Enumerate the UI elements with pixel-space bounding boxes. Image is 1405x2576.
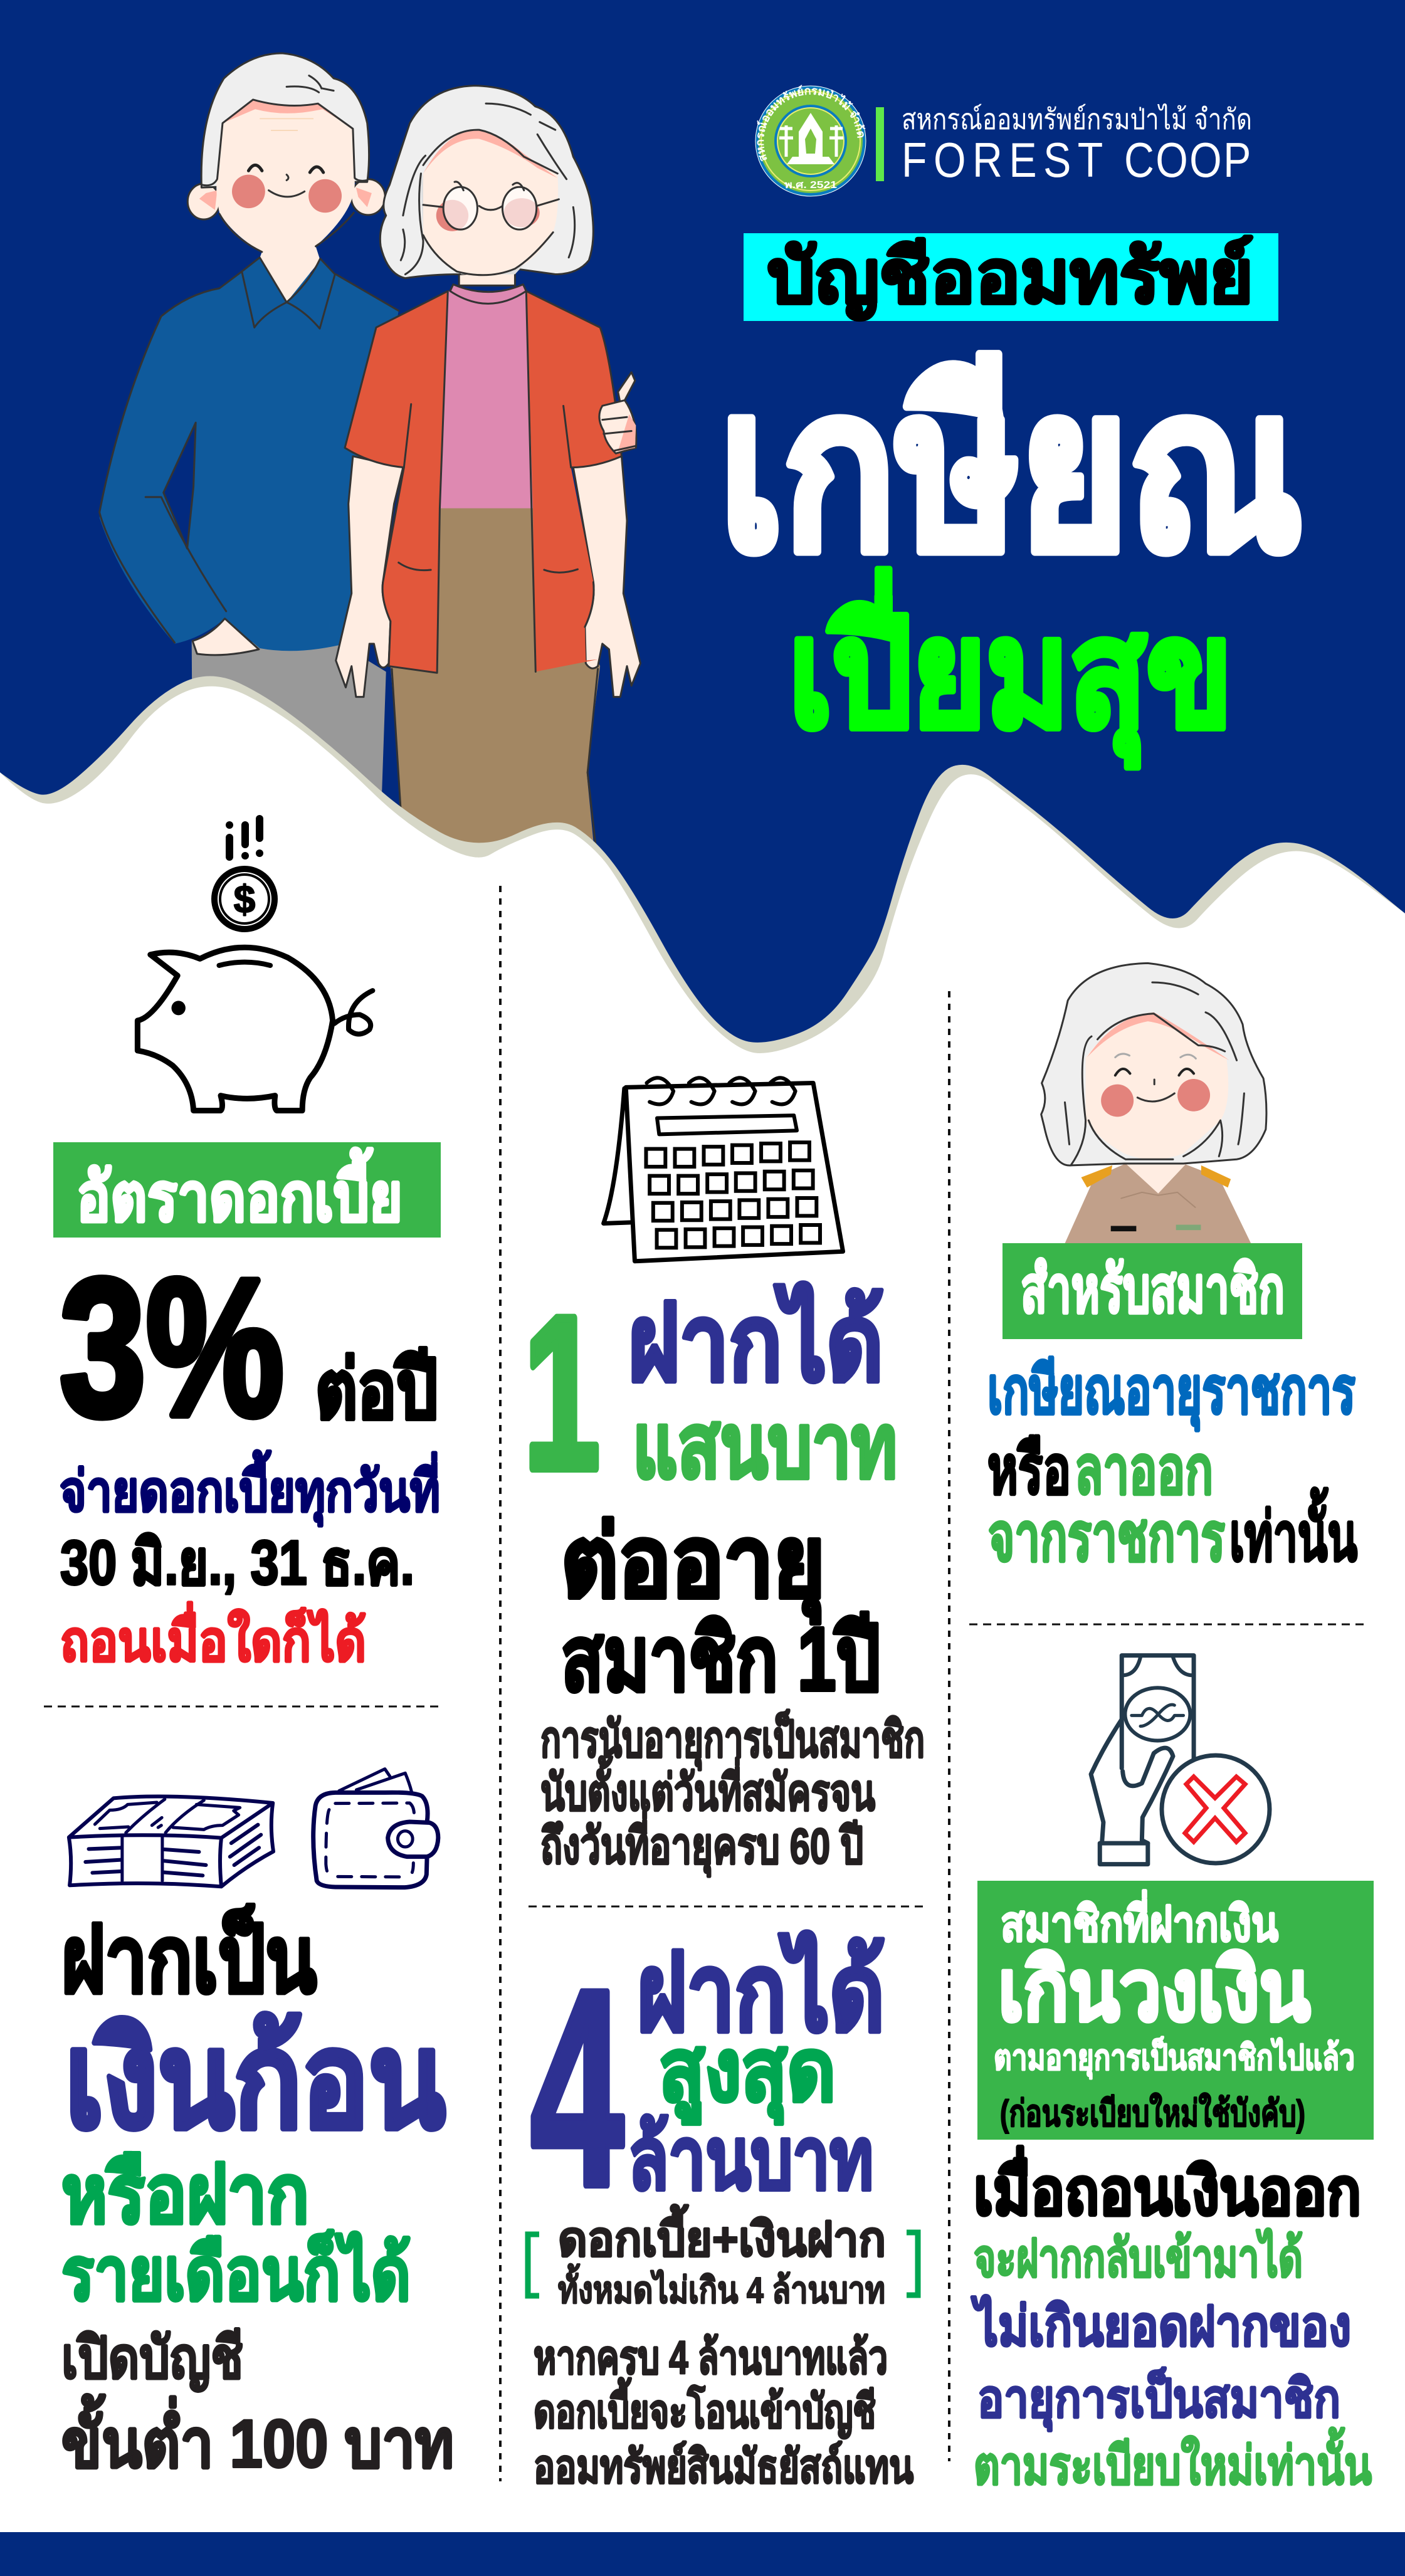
panel: over limit notice [977, 1881, 1374, 2140]
man's hand on woman's arm [599, 372, 636, 453]
woman's pink top [439, 291, 534, 508]
monthly: รายเดือนก็ได้ [61, 2229, 411, 2316]
horizontal dashed divider left [44, 1705, 440, 1708]
note: counting membership line 1: การนับอายุการเป็นสมาชิก [540, 1709, 925, 1771]
main title second line: เปี่ยมสุข [789, 569, 1233, 768]
panel: over limit notice: เกินวงเงิน [998, 1943, 1310, 2038]
horizontal dashed divider right [969, 1624, 1364, 1625]
deposit allowed max: ฝากได้ [637, 1932, 885, 2053]
logo: cooperative seal [755, 85, 866, 197]
withdraw anytime: ถอนเมื่อใดก็ได้ [60, 1602, 366, 1673]
highest: สูงสุด [659, 2022, 836, 2125]
pay dates: 30 มิ.ย., 31 ธ.ค. [60, 1528, 414, 1598]
woman's skirt [391, 507, 600, 873]
interest plus deposit: ดอกเบี้ย+เงินฝาก [558, 2204, 886, 2266]
main title: เกษียณ [719, 345, 1302, 596]
icon: calendar [604, 1078, 843, 1261]
heading: deposit as: ฝากเป็น [61, 1904, 317, 2012]
subtitle: บัญชีออมทรัพย์ [767, 236, 1253, 320]
man's head [187, 53, 385, 302]
FOREST COOP wordmark: FOREST [902, 133, 1103, 187]
or deposit: หรือฝาก [61, 2148, 309, 2240]
deposit allowed: ฝากได้ [628, 1282, 883, 1403]
logo: cooperative seal: สหกรณ์ออมทรัพย์กรมป่าไม้ จำกัด [757, 85, 865, 162]
man's sweater [100, 271, 399, 651]
note: counting membership line 2: นับตั้งแต่วันที่สมัครจน [540, 1756, 875, 1821]
horizontal dashed divider middle [529, 1906, 924, 1907]
label: interest rate: อัตราดอกเบี้ย [76, 1147, 403, 1235]
man's sweater outlines [100, 271, 399, 643]
woman's neck and sweater collar [450, 269, 526, 303]
FOREST COOP wordmark: COOP [1124, 133, 1251, 187]
resign: ลาออก [1075, 1432, 1213, 1508]
membership age: อายุการเป็นสมาชิก [977, 2367, 1340, 2432]
numeral 4: 4 [530, 1931, 625, 2244]
icon: banknote stack [69, 1796, 273, 1886]
from government service: จากราชการ [988, 1499, 1225, 1575]
numeral 1: 1 [524, 1271, 600, 1515]
illustration: retired official woman [1041, 963, 1266, 1243]
vertical dotted divider left [499, 886, 502, 2481]
total not exceeding: ทั้งหมดไม่เกิน 4 ล้านบาท [558, 2264, 885, 2311]
logo divider bar [876, 107, 884, 181]
interest figure 3%: 3% [60, 1239, 284, 1457]
icon: piggy bank with coin: $ [234, 878, 255, 922]
icon: piggy bank with coin [137, 815, 372, 1111]
vertical dotted divider right [948, 991, 950, 2461]
per year: ต่อปี [315, 1344, 438, 1436]
FOREST COOP wordmark [902, 133, 1251, 187]
when withdrawing: เมื่อถอนเงินออก [974, 2146, 1361, 2229]
woman's left arm and hand [336, 456, 403, 697]
bracket left [528, 2234, 539, 2296]
hundred thousand baht: แสนบาท [633, 1397, 897, 1496]
woman's head [380, 86, 593, 278]
member one year: สมาชิก 1ปี [561, 1609, 880, 1710]
note line 1: หากครบ 4 ล้านบาทแล้ว [534, 2332, 888, 2384]
organisation name: สหกรณ์ออมทรัพย์กรมป่าไม้ จำกัด [902, 103, 1252, 135]
note line 3: ออมทรัพย์สินมัธยัสถ์แทน [534, 2441, 913, 2493]
woman's right arm and hand [573, 456, 640, 697]
gap between man's arm and torso [164, 423, 196, 549]
woman's orange cardigan [345, 291, 448, 673]
note line 2: ดอกเบี้ยจะโอนเข้าบัญชี [534, 2377, 876, 2439]
open account: เปิดบัญชี [61, 2326, 243, 2392]
panel: over limit notice: (ก่อนระเบียบใหม่ใช้บังคับ) [1000, 2092, 1305, 2134]
per membership age: ต่ออายุ [561, 1507, 825, 1624]
or: หรือ [987, 1432, 1071, 1508]
subtitle box [744, 233, 1278, 321]
wave: grey shadow edge [0, 676, 1405, 1128]
panel: over limit notice: สมาชิกที่ฝากเงิน [1001, 1890, 1278, 1952]
logo: cooperative seal: พ.ศ. 2521 [784, 180, 837, 191]
heading: lump sum: เงินก้อน [65, 2006, 445, 2155]
icon: wallet [313, 1769, 438, 1888]
man's hand in pocket [192, 619, 259, 655]
man's collar [242, 258, 335, 329]
note: counting membership line 3: ถึงวันที่อายุครบ 60 ปี [540, 1811, 863, 1878]
minimum amount: ขั้นต่ำ 100 บาท [61, 2394, 454, 2481]
label: for members [1002, 1243, 1302, 1339]
million baht: ล้านบาท [628, 2111, 873, 2207]
wave: white body [0, 686, 1405, 2576]
pay date heading: จ่ายดอกเบี้ยทุกวันที่ [60, 1450, 440, 1527]
illustration: elderly couple [100, 53, 640, 873]
icon: hand with banknote and cross [1091, 1656, 1270, 1864]
footer bar [0, 2532, 1405, 2576]
bracket right [907, 2232, 918, 2295]
navy background [0, 0, 1405, 1066]
man's trousers [192, 641, 386, 828]
